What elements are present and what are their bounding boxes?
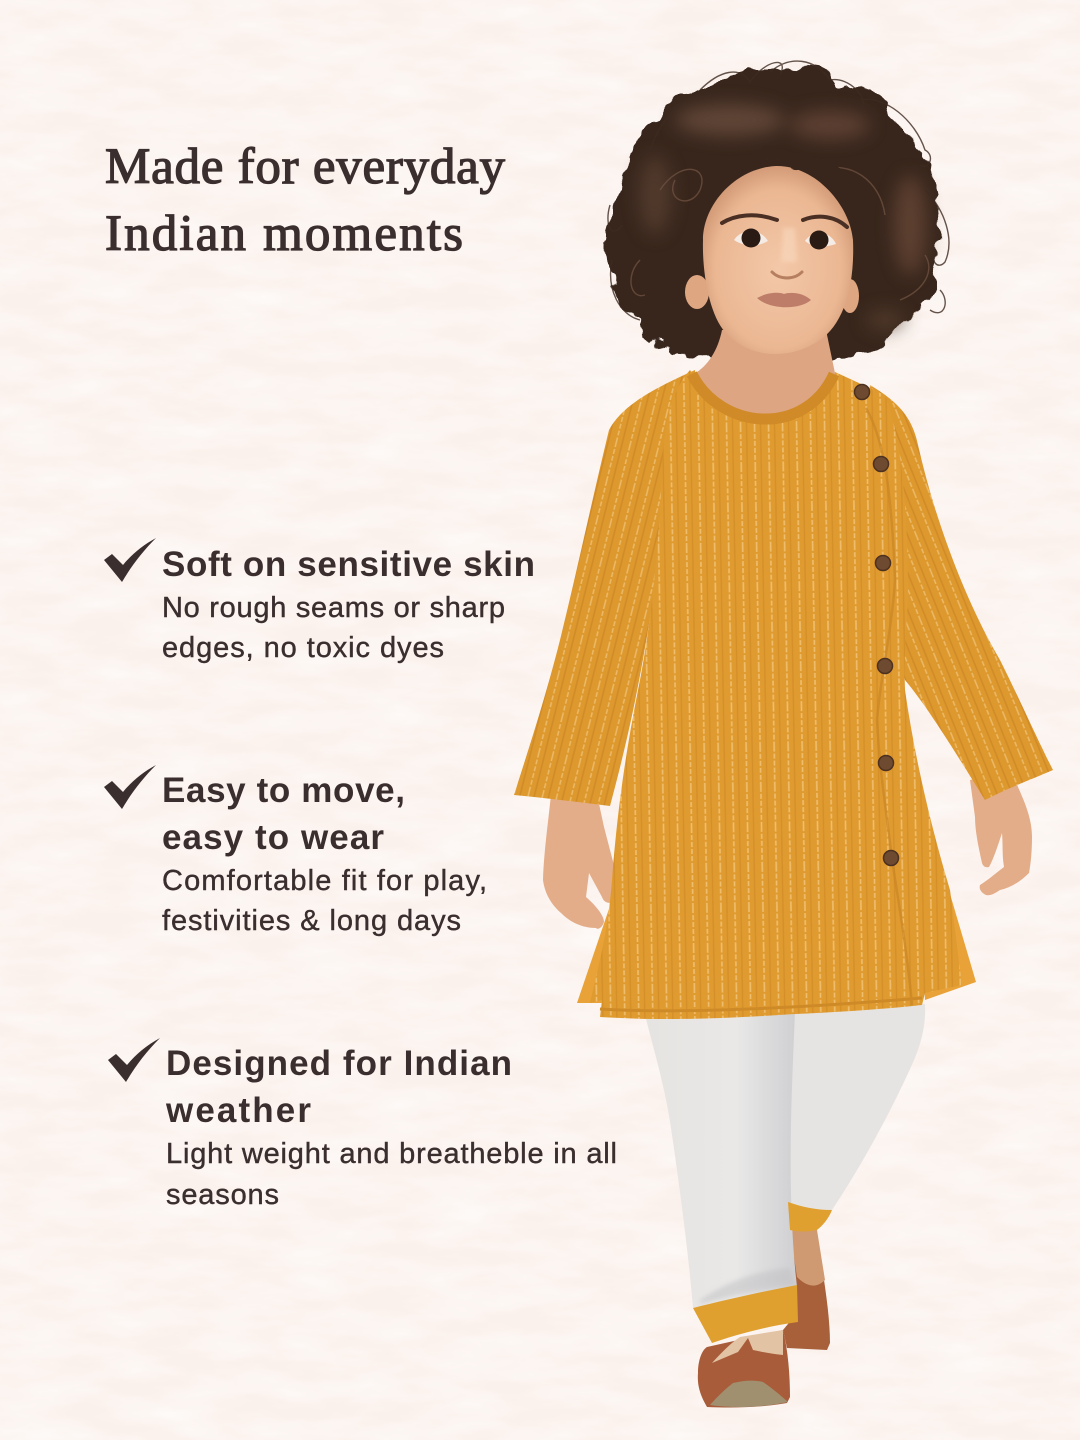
left hand xyxy=(543,785,616,929)
facial features xyxy=(722,215,847,307)
kurta body xyxy=(590,370,962,1019)
hair xyxy=(608,61,949,362)
kurta hem xyxy=(600,998,922,1011)
heading: easy to move, easy to wear xyxy=(162,771,405,857)
title: Made for everyday xyxy=(105,139,506,195)
buttons xyxy=(854,384,898,866)
white pants xyxy=(645,1004,925,1343)
pant cuffs xyxy=(788,1202,832,1232)
text: designed for Indian weather detail xyxy=(166,1138,617,1211)
curl wisps xyxy=(608,61,949,320)
side placket xyxy=(866,408,912,1005)
neckline xyxy=(692,374,834,419)
benefit: designed for Indian weather xyxy=(108,1038,617,1211)
text: soft on sensitive skin detail xyxy=(162,592,505,664)
sleeve: viewer left xyxy=(514,370,700,806)
forelock xyxy=(690,148,870,240)
heading: designed for Indian weather: Designed for Indian xyxy=(166,1044,512,1083)
heading: designed for Indian weather xyxy=(165,1044,512,1130)
text: soft on sensitive skin detail: edges, no toxic dyes xyxy=(162,632,444,664)
heading: designed for Indian weather: weather xyxy=(165,1091,311,1130)
benefit: soft on sensitive skin xyxy=(104,538,535,664)
text: easy to move detail xyxy=(162,865,487,937)
face xyxy=(703,166,853,354)
heading: easy to move, easy to wear: easy to wear xyxy=(162,818,384,857)
benefit: easy to move, easy to wear xyxy=(104,765,487,937)
kurta side slit panels xyxy=(577,900,625,1003)
text: designed for Indian weather detail: Light weight and breatheble in all xyxy=(166,1138,617,1170)
icon: check mark xyxy=(104,538,156,582)
text: designed for Indian weather detail: seasons xyxy=(166,1179,279,1211)
heading: easy to move, easy to wear: Easy to move, xyxy=(162,771,405,810)
text: easy to move detail: festivities & long days xyxy=(162,905,461,937)
illustration: child in mustard kurta xyxy=(514,61,1053,1408)
hair highlights xyxy=(639,104,926,330)
icon: check mark xyxy=(108,1038,160,1082)
text: soft on sensitive skin detail: No rough seams or sharp xyxy=(162,592,505,624)
heading: soft on sensitive skin: Soft on sensitive skin xyxy=(162,545,535,584)
ears xyxy=(685,275,859,313)
title xyxy=(105,139,506,262)
right hand xyxy=(970,770,1032,895)
neckline edge xyxy=(692,374,834,419)
text: easy to move detail: Comfortable fit for play, xyxy=(162,865,487,897)
hair mass xyxy=(608,71,941,362)
title: Indian moments xyxy=(105,206,463,262)
icon: check mark xyxy=(104,765,156,809)
sleeve: viewer right xyxy=(860,385,1053,800)
neck xyxy=(694,330,836,416)
kurta xyxy=(514,370,1053,1019)
shoes xyxy=(698,1230,830,1408)
